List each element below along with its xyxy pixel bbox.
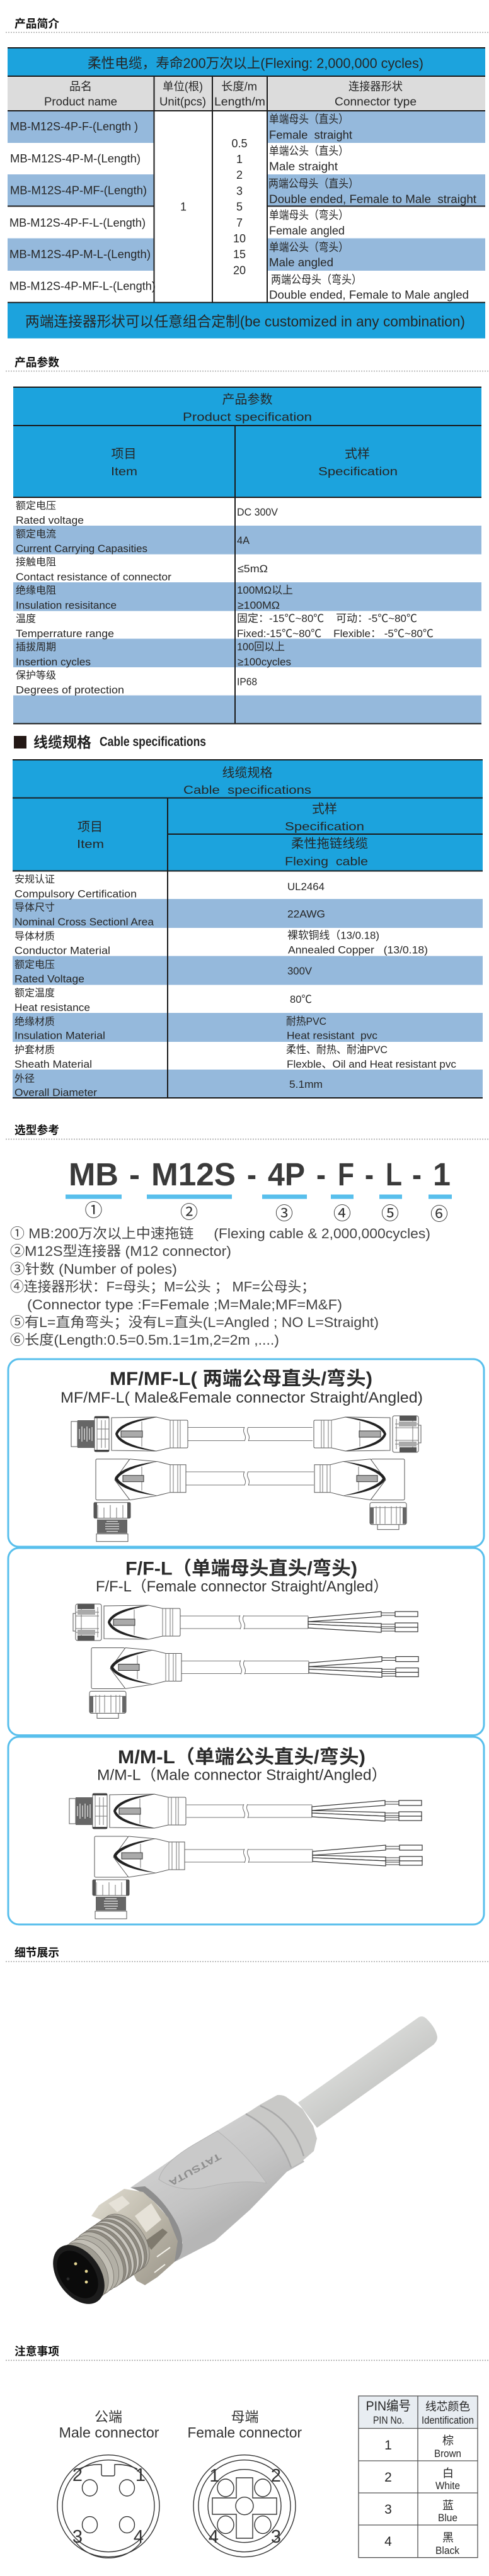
panel title: MF/MF-L( 两端公母直头/弯头) [110,1369,372,1389]
item column: 额定温度 [14,988,55,999]
product names: MB-M12S-4P-MF-L-(Length) [9,280,156,292]
item column: 保护等级 [16,670,56,681]
code legend: ④连接器形状：F=母头；M=公头 ； MF=公母头； [10,1279,315,1295]
item column: Rated voltage [16,514,84,526]
diagram: female pinout: 3 [271,2527,281,2547]
diagram: female pinout: 1 [209,2466,220,2486]
part number code: - [365,1156,374,1192]
logo recess [159,2131,267,2189]
connector types: 两端公母头（直头） [268,178,359,190]
section heading: product intro: 产品简介 [14,17,59,30]
part number code [66,1156,452,1224]
connector types: Double ended, Female to Male straight [269,193,476,205]
table header: 项目 [78,820,103,834]
drawing: angled cable [94,1459,406,1542]
part number code: 1 [433,1156,451,1192]
item column: Insulation Material [14,1030,105,1042]
product names: MB-M12S-4P-F-L-(Length) [9,217,146,229]
row 3: 3 [384,2502,392,2517]
code legend [10,1226,430,1348]
code legend: ⑤有L=直角弯头；没有L=直头(L=Angled ; NO L=Straight) [10,1314,379,1330]
connector types: Female straight [269,129,352,142]
code legend: ③针数 (Number of poles) [10,1261,177,1277]
part number code: - [247,1156,256,1192]
part number code: L [386,1156,402,1192]
code legend: (Connector type :F=Female ;M=Male;MF=M&F) [27,1297,342,1313]
length values: 5 [236,200,243,213]
specification column: Fixed:-15℃~80℃ Flexible： -5℃~80℃ [237,628,434,640]
item column: Heat resistance [14,1002,90,1014]
item column: Nominal Cross Sectionl Area [14,916,154,928]
gray ring [130,2186,183,2262]
table: cable specifications [13,760,483,1099]
table header: Product name [44,96,117,108]
length values [231,137,248,277]
item column: 绝缘材质 [14,1016,55,1027]
table header: Specification [285,820,364,833]
part number code: 4P [268,1156,305,1192]
connector types: 单端母头（弯头） [269,209,348,222]
item column: 护套材质 [14,1044,55,1056]
table header: Length/m [214,96,265,108]
item column: Degrees of protection [16,684,124,696]
section heading: product parameters: 产品参数 [14,356,59,369]
row 2: 2 [384,2470,392,2485]
banner: customization [8,303,485,339]
part number code: ② [180,1202,198,1222]
table header [8,76,485,111]
row 4: 黑 [442,2531,454,2544]
table header: 长度/m [221,81,257,93]
connector face [42,2235,115,2313]
pins [67,2262,88,2283]
table header: 产品参数 [222,392,272,407]
overmold body [130,2104,304,2262]
row 2: 白 [442,2467,454,2480]
logo: TATSUTA [167,2150,223,2188]
diagram: female pinout: 2 [271,2466,281,2486]
table header [359,2396,478,2429]
specification column: 5.1mm [289,1078,323,1090]
table header: Flexing cable [285,856,368,868]
section heading: detail view: 细节展示 [14,1946,59,1959]
table header: Item [77,838,104,850]
diagram: male pinout: 1 [135,2465,146,2485]
product photo: M12 connector [42,2016,437,2313]
row 1: 1 [384,2438,392,2453]
length values: 15 [233,248,246,261]
specification column: ≥100cycles [238,656,291,668]
item column: 安规认证 [14,874,55,885]
row 4: 4 [384,2534,392,2549]
table header: Product specification [183,411,312,424]
cable [298,2016,437,2128]
table header: 式样 [312,802,337,816]
unit value: 1 [180,200,187,213]
table: product list [8,48,485,339]
specification column: 耐热PVC [286,1015,326,1027]
specification column: ≤5mΩ [238,563,268,575]
section heading: notes: 注意事项 [14,2345,59,2358]
connector types: 单端公头（弯头） [269,241,348,254]
product names [9,120,156,292]
product names: MB-M12S-4P-M-(Length) [10,152,141,165]
section heading: cable specifications [14,734,206,750]
specification column: DC 300V [237,506,279,518]
specification column: IP68 [237,676,257,687]
item column: Current Carrying Capasities [16,543,147,555]
item column: Contact resistance of connector [16,571,171,583]
diagram: female pinout: 4 [209,2527,219,2547]
specification column: 柔性、耐热、耐油PVC [286,1044,388,1056]
item column: 额定电压 [16,500,56,511]
female connector label [188,2409,302,2441]
female connector label: Female connector [188,2424,302,2441]
table header: 柔性拖链线缆 [291,837,368,851]
item column: Insulation resisitance [16,599,117,611]
connector types: 单端母头（直头） [269,113,348,126]
code legend: ⑥长度(Length:0.5=0.5m.1=1m,2=2m ,....) [10,1332,279,1348]
code legend: ②M12S型连接器 (M12 connector) [10,1243,231,1259]
row 2 [384,2467,460,2492]
connector types: Male angled [269,256,333,269]
item column: Insertion cycles [16,656,91,668]
specification column: 100MΩ以上 [237,584,293,596]
specification column: 22AWG [287,908,325,920]
female connector label: 母端 [231,2409,259,2425]
item column: 外径 [14,1073,35,1084]
banner: flexing cycles: 柔性电缆，寿命200万次以上(Flexing: 2,000,000 cycles) [88,55,423,71]
product names: MB-M12S-4P-MF-(Length) [10,184,147,196]
drawing: straight cable [69,1794,422,1829]
panel: F/F-L [8,1548,484,1735]
item column: 接触电阻 [16,556,56,568]
part number code: ① [84,1200,103,1220]
diagram: male pinout [57,2455,159,2558]
section heading: cable specifications: Cable specifications [100,735,206,749]
banner: customization: 两端连接器形状可以任意组合定制(be customized in any combination) [25,313,465,329]
banner: flexing cycles [8,48,485,76]
table header: 连接器形状 [348,81,403,93]
table header: 项目 [111,448,136,461]
item column: Overall Diameter [14,1087,97,1099]
specification column: 固定：-15℃~80℃ 可动：-5℃~80℃ [237,613,417,624]
specification column: 300V [287,965,313,977]
item column: 额定电压 [14,959,55,971]
specification column: UL2464 [287,881,325,893]
drawing: angled cable [93,1836,422,1919]
item column [14,874,154,1099]
table header: 线缆规格 [222,765,272,780]
table header: Item [111,465,137,478]
connector types: Male straight [269,161,338,173]
section heading: cable specifications: 线缆规格 [33,734,91,750]
specification column [286,881,456,1090]
strain relief [246,2095,317,2167]
item column: 绝缘电阻 [16,585,56,596]
metal nut [91,2189,178,2285]
specification column: 裸软铜线（13/0.18) [287,929,379,941]
panel: MF/MF-L [8,1359,484,1547]
part number code: MB [69,1156,118,1192]
specification column: ≥100MΩ [238,599,280,611]
specification column: 100回以上 [237,641,285,653]
table header: 品名 [69,81,92,93]
connector types [268,113,476,301]
male connector label: Male connector [59,2424,159,2441]
panel title: M/M-L（单端公头直头/弯头) [118,1747,365,1768]
item column: 插拔周期 [16,641,56,653]
part number code: ④ [333,1204,351,1223]
part number code: - [412,1156,422,1192]
connector types: Female angled [269,224,345,237]
part number code: M12S [151,1156,236,1192]
section heading: selection reference: 选型参考 [14,1124,59,1137]
table: pin identification [359,2396,478,2558]
part number code: ③ [275,1204,293,1223]
item column: Sheath Material [14,1058,92,1070]
thread [49,2205,159,2308]
table header: 线芯颜色 [425,2400,470,2413]
part number code: - [129,1156,140,1192]
table header: PIN No. [373,2414,405,2426]
length values: 3 [236,185,243,198]
table header: 单位(根) [163,81,203,93]
item column [16,500,171,696]
row 3 [384,2499,457,2524]
diagram: female pinout [193,2455,296,2557]
item column: 额定电流 [16,529,56,540]
item column: Temperrature range [16,628,114,640]
panel title: F/F-L（单端母头直头/弯头) [125,1559,357,1579]
table header: Specification [318,465,398,478]
length values: 1 [236,153,243,166]
specification column: 4A [237,534,250,546]
table header: Identification [422,2414,474,2426]
table header: Cable specifications [183,784,311,796]
row 1: 棕 [442,2434,454,2447]
specification column: Annealed Copper (13/0.18) [288,944,428,956]
row 4 [384,2531,459,2556]
table: product specification [13,387,481,724]
diagram: male pinout: 2 [72,2465,83,2485]
table header: Connector type [335,96,417,108]
specification column [237,506,434,687]
drawing: angled cable [89,1648,418,1719]
row stripes [13,526,481,724]
row stripes [8,111,485,271]
product names: MB-M12S-4P-M-L-(Length) [9,248,151,261]
length values: 0.5 [231,137,248,150]
item column: 温度 [16,613,36,624]
panel subtitle: M/M-L（Male connector Straight/Angled） [97,1767,387,1784]
code legend: ① MB:200万次以上中速拖链 (Flexing cable & 2,000,000cycles) [10,1226,430,1241]
specification column: 80℃ [290,993,312,1005]
row 1 [384,2434,461,2460]
male connector label [59,2409,159,2441]
connector types: 单端公头（直头） [269,145,348,157]
row 4: Black [435,2545,459,2556]
diagram: male pinout: 4 [134,2527,144,2547]
item column: Rated Voltage [14,973,84,985]
table header: Unit(pcs) [159,96,206,108]
drawing: straight cable [73,1604,418,1641]
panel: M/M-L [8,1737,484,1924]
panel subtitle: F/F-L（Female connector Straight/Angled） [96,1578,388,1595]
panel subtitle: MF/MF-L( Male&Female connector Straight/Angled) [60,1389,423,1406]
table header: 式样 [345,447,370,461]
specification column: Flexble、Oil and Heat resistant pvc [287,1058,456,1070]
table header: PIN编号 [366,2399,411,2414]
part number code: ⑥ [430,1204,448,1224]
item column: 导体材质 [14,930,55,942]
connector types: 两端公母头（弯头） [271,273,362,286]
part number code: F [338,1156,354,1192]
row 3: Blue [438,2512,457,2524]
length values: 20 [233,264,246,277]
row 1: Brown [434,2448,461,2460]
item column: Compulsory Certification [14,888,137,900]
row stripes [13,899,483,1098]
product names: MB-M12S-4P-F-(Length ) [10,120,138,133]
part number code: - [316,1156,326,1192]
part number code: ⑤ [381,1204,399,1223]
length values: 10 [233,232,246,245]
table header [13,387,481,497]
diagram: male pinout: 3 [72,2527,83,2547]
item column: Conductor Material [14,944,110,957]
row 3: 蓝 [442,2499,454,2512]
row 2: White [435,2480,460,2492]
connector types: Double ended, Female to Male angled [269,288,469,301]
male connector label: 公端 [95,2409,122,2425]
specification column: Heat resistant pvc [287,1030,378,1042]
drawing: straight cable [71,1416,421,1452]
length values: 2 [236,169,243,181]
item column: 导体尺寸 [14,902,55,913]
length values: 7 [236,217,243,229]
table header [13,760,483,871]
